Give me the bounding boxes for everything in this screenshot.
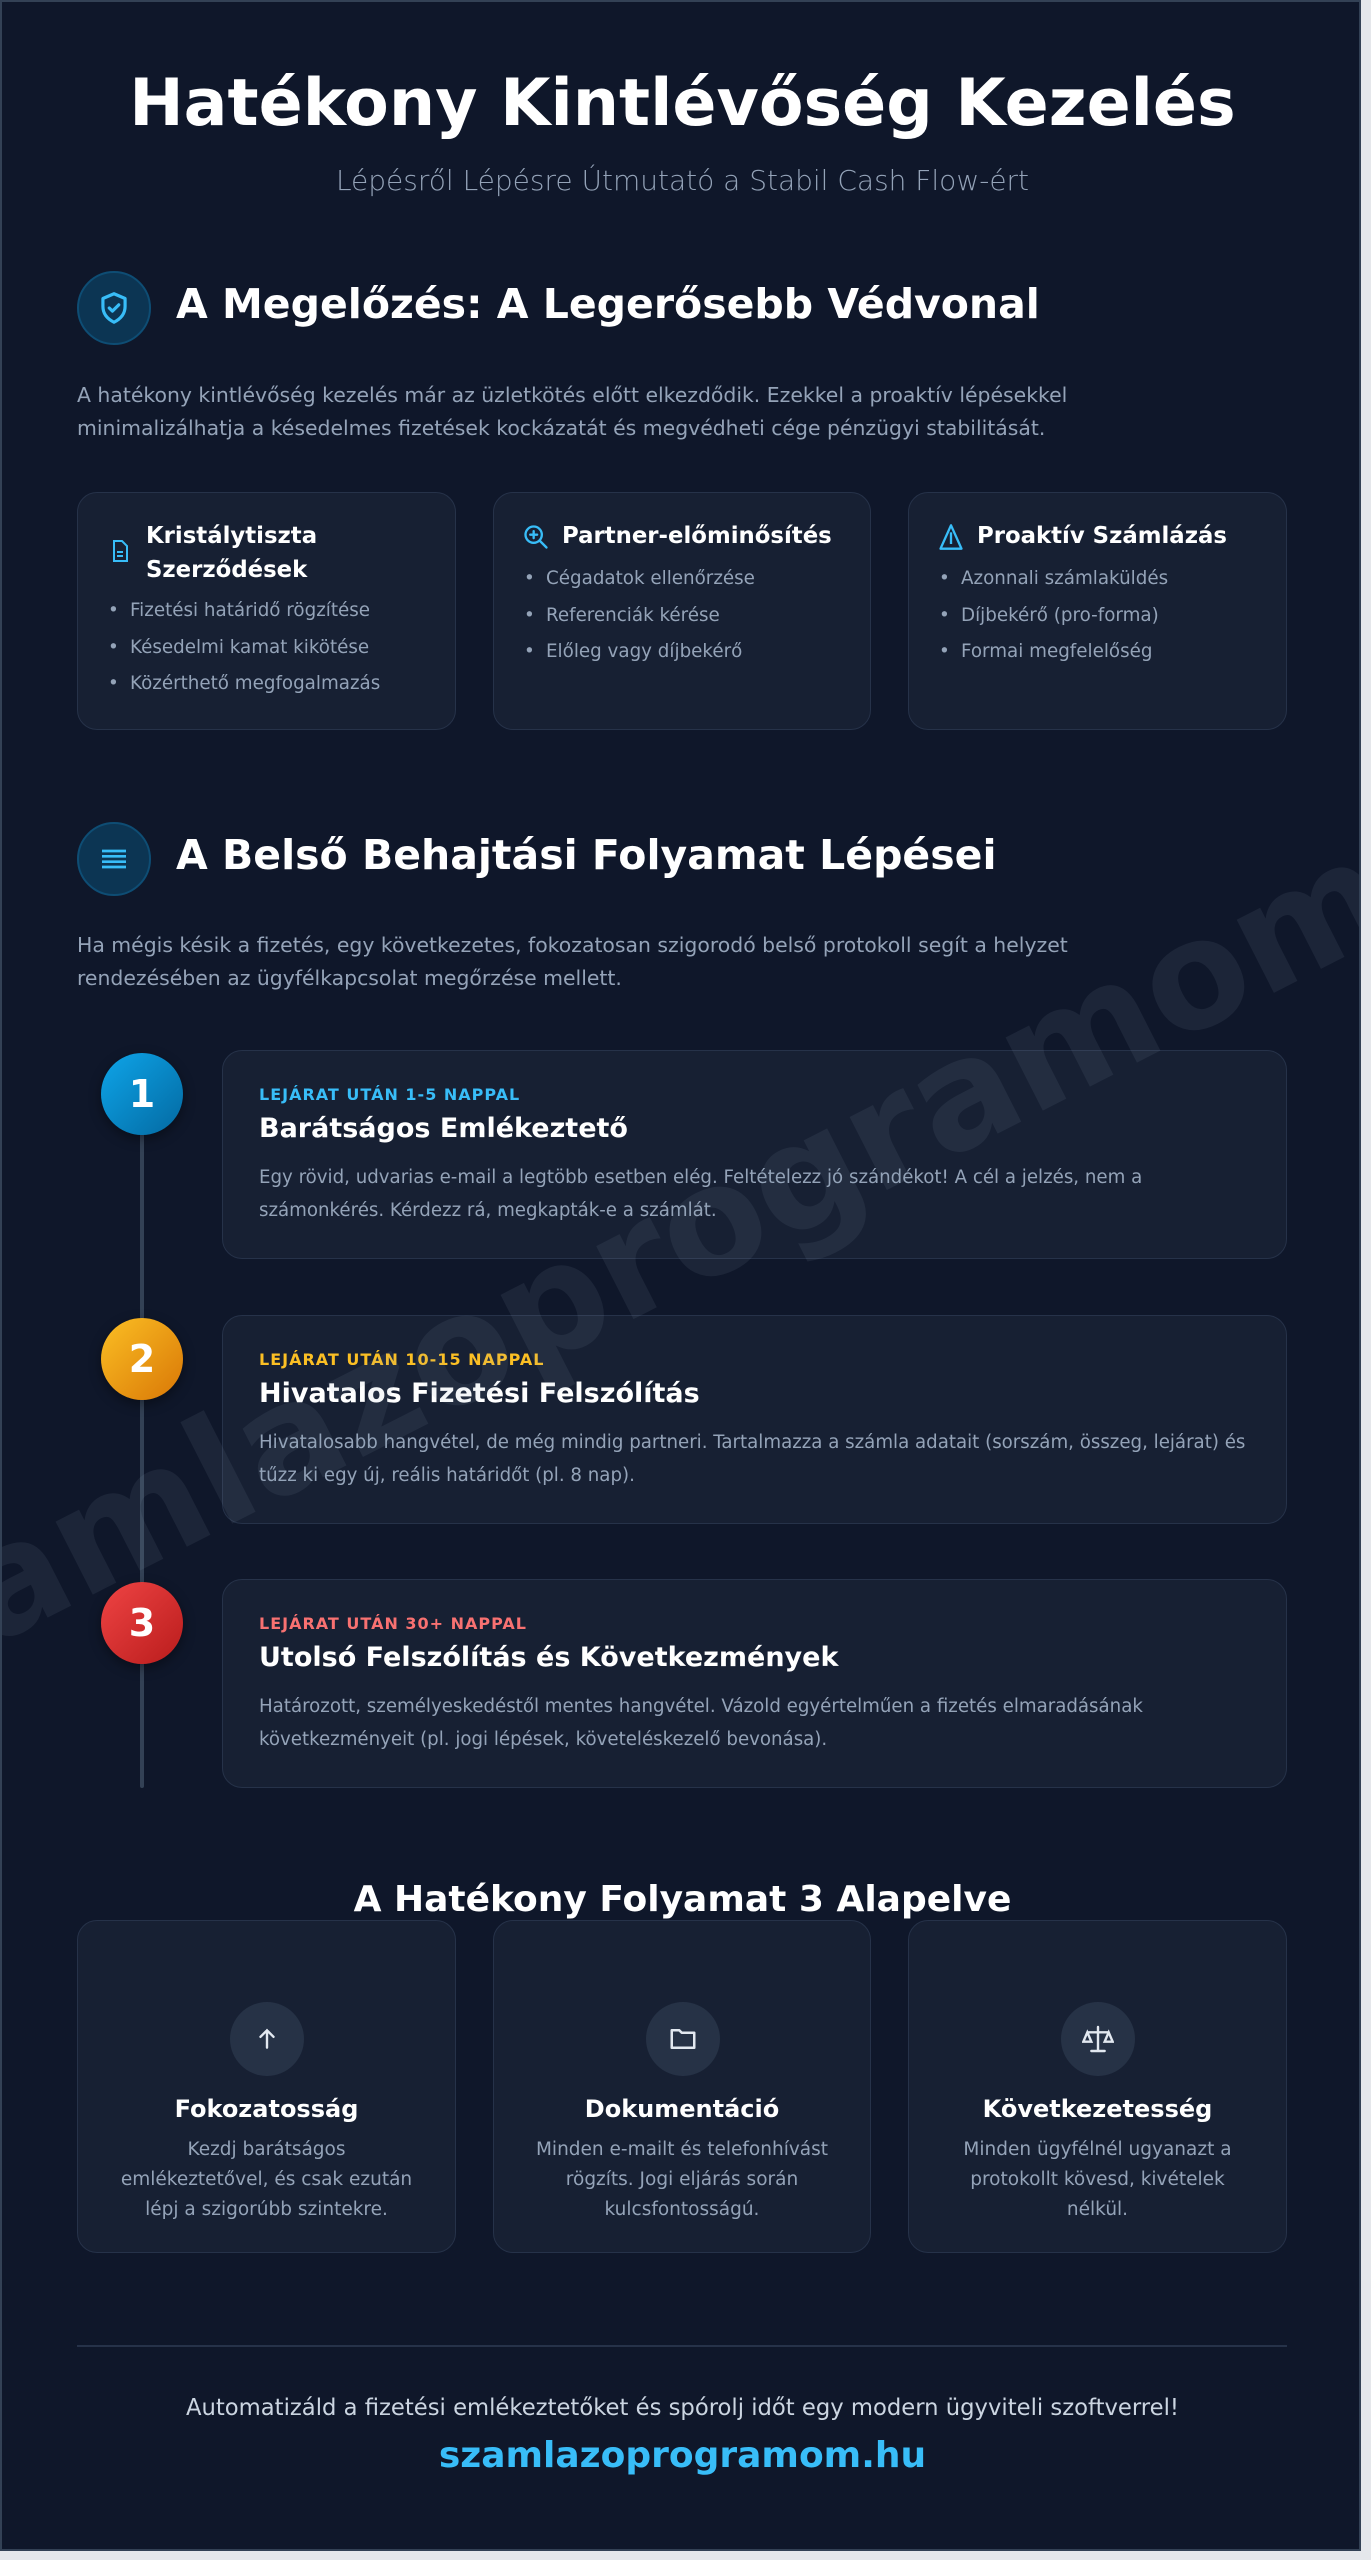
- card: proactive invoicing: Díjbekérő (pro-forma): [961, 604, 1159, 626]
- card: proactive invoicing: Proaktív Számlázás: [977, 523, 1227, 549]
- heading: internal process: A Belső Behajtási Folyamat Lépései: [176, 831, 997, 879]
- step 3 card: Határozott, személyeskedéstől mentes hangvétel. Vázold egyértelműen a fizetés elmaradásának következményeit (pl. jogi lépések, követeléskezelő bevonása).: [259, 1696, 1143, 1750]
- step 2 card: [222, 1315, 1287, 1524]
- subtitle: Lépésről Lépésre Útmutató a Stabil Cash Flow-ért: [336, 164, 1029, 197]
- icon: document: [113, 540, 128, 562]
- card: proactive invoicing: Azonnali számlaküldés: [961, 568, 1168, 589]
- card: partner screening: Referenciák kérése: [546, 604, 720, 626]
- step 2 card: Hivatalos Fizetési Felszólítás: [259, 1378, 700, 1409]
- principle: documentation: Dokumentáció: [585, 2095, 779, 2123]
- card: proactive invoicing: [908, 492, 1287, 730]
- text: prevention intro: A hatékony kintlévőség kezelés már az üzletkötés előtt elkezdődik. Ezekkel a proaktív lépésekkel minimalizálhatja a késedelmes fizetések kockázatát és megvédheti cége pénzügyi stabilitását.: [77, 383, 1067, 440]
- text: process intro: Ha mégis késik a fizetés, egy következetes, fokozatosan szigorodó belső protokoll segít a helyzet rendezésében az ügyfélkapcsolat megőrzése mellett.: [77, 933, 1068, 990]
- principle: consistency: Következetesség: [983, 2095, 1212, 2123]
- timeline line: [140, 1088, 144, 1788]
- card: partner screening: [493, 492, 871, 730]
- icon: scales: [1061, 2002, 1135, 2076]
- step 3 card: [222, 1579, 1287, 1788]
- card: proactive invoicing: Formai megfelelőség: [961, 641, 1152, 662]
- step 1 card: Barátságos Emlékeztető: [259, 1113, 628, 1144]
- principle: gradual: Kezdj barátságos emlékeztetővel, és csak ezután lépj a szigorúbb szintekre.: [121, 2139, 412, 2220]
- title: Hatékony Kintlévőség Kezelés: [129, 66, 1236, 141]
- icon: folder: [646, 2002, 720, 2076]
- icon: search plus: [524, 525, 548, 549]
- footer text: Automatizáld a fizetési emlékeztetőket és spórolj időt egy modern ügyviteli szoftverrel!: [186, 2395, 1179, 2421]
- step 2 card: Hivatalosabb hangvétel, de még mindig partneri. Tartalmazza a számla adatait (sorszám, összeg, lejárat) és tűzz ki egy új, reális határidőt (pl. 8 nap).: [259, 1432, 1245, 1486]
- principle: consistency: [908, 1920, 1287, 2253]
- icon: shield: [77, 271, 151, 345]
- step 3 marker: [101, 1582, 183, 1664]
- icon: arrow up: [230, 2002, 304, 2076]
- step 1 marker: 1: [129, 1072, 155, 1116]
- icon: triangle: [939, 524, 963, 550]
- step 2 marker: 2: [129, 1337, 155, 1381]
- card: partner screening: Előleg vagy díjbekérő: [546, 641, 742, 662]
- principle: gradual: [77, 1920, 456, 2253]
- footer link: szamlazoprogramom.hu: [439, 2435, 926, 2476]
- card: contracts: Szerződések: [146, 557, 307, 583]
- heading: prevention: A Megelőzés: A Legerősebb Védvonal: [176, 280, 1040, 328]
- step 3 card: LEJÁRAT UTÁN 30+ NAPPAL: [259, 1614, 527, 1633]
- card: partner screening: Partner-előminősítés: [562, 523, 832, 549]
- step 2 marker: [101, 1318, 183, 1400]
- card: contracts: Fizetési határidő rögzítése: [130, 600, 370, 621]
- card: contracts: Késedelmi kamat kikötése: [130, 636, 369, 658]
- card: contracts: [77, 492, 456, 730]
- step 2 card: LEJÁRAT UTÁN 10-15 NAPPAL: [259, 1350, 544, 1369]
- principle: documentation: Minden e-mailt és telefonhívást rögzíts. Jogi eljárás során kulcsfontosságú.: [536, 2139, 828, 2220]
- icon: list: [77, 822, 151, 896]
- card: partner screening: Cégadatok ellenőrzése: [546, 568, 755, 589]
- principle: gradual: Fokozatosság: [175, 2095, 358, 2123]
- principle: documentation: [493, 1920, 871, 2253]
- step 3 marker: 3: [129, 1601, 155, 1645]
- principle: consistency: Minden ügyfélnél ugyanazt a protokollt kövesd, kivételek nélkül.: [963, 2139, 1232, 2220]
- card: contracts: Kristálytiszta: [146, 523, 317, 549]
- step 1 card: Egy rövid, udvarias e-mail a legtöbb esetben elég. Feltételezz jó szándékot! A cél a jelzés, nem a számonkérés. Kérdezz rá, megkapták-e a számlát.: [259, 1167, 1142, 1221]
- card: contracts: Közérthető megfogalmazás: [130, 673, 380, 694]
- heading: principles: A Hatékony Folyamat 3 Alapelve: [354, 1879, 1011, 1920]
- step 1 card: LEJÁRAT UTÁN 1-5 NAPPAL: [259, 1085, 520, 1104]
- step 1 marker: [101, 1053, 183, 1135]
- step 1 card: [222, 1050, 1287, 1259]
- step 3 card: Utolsó Felszólítás és Következmények: [259, 1642, 838, 1673]
